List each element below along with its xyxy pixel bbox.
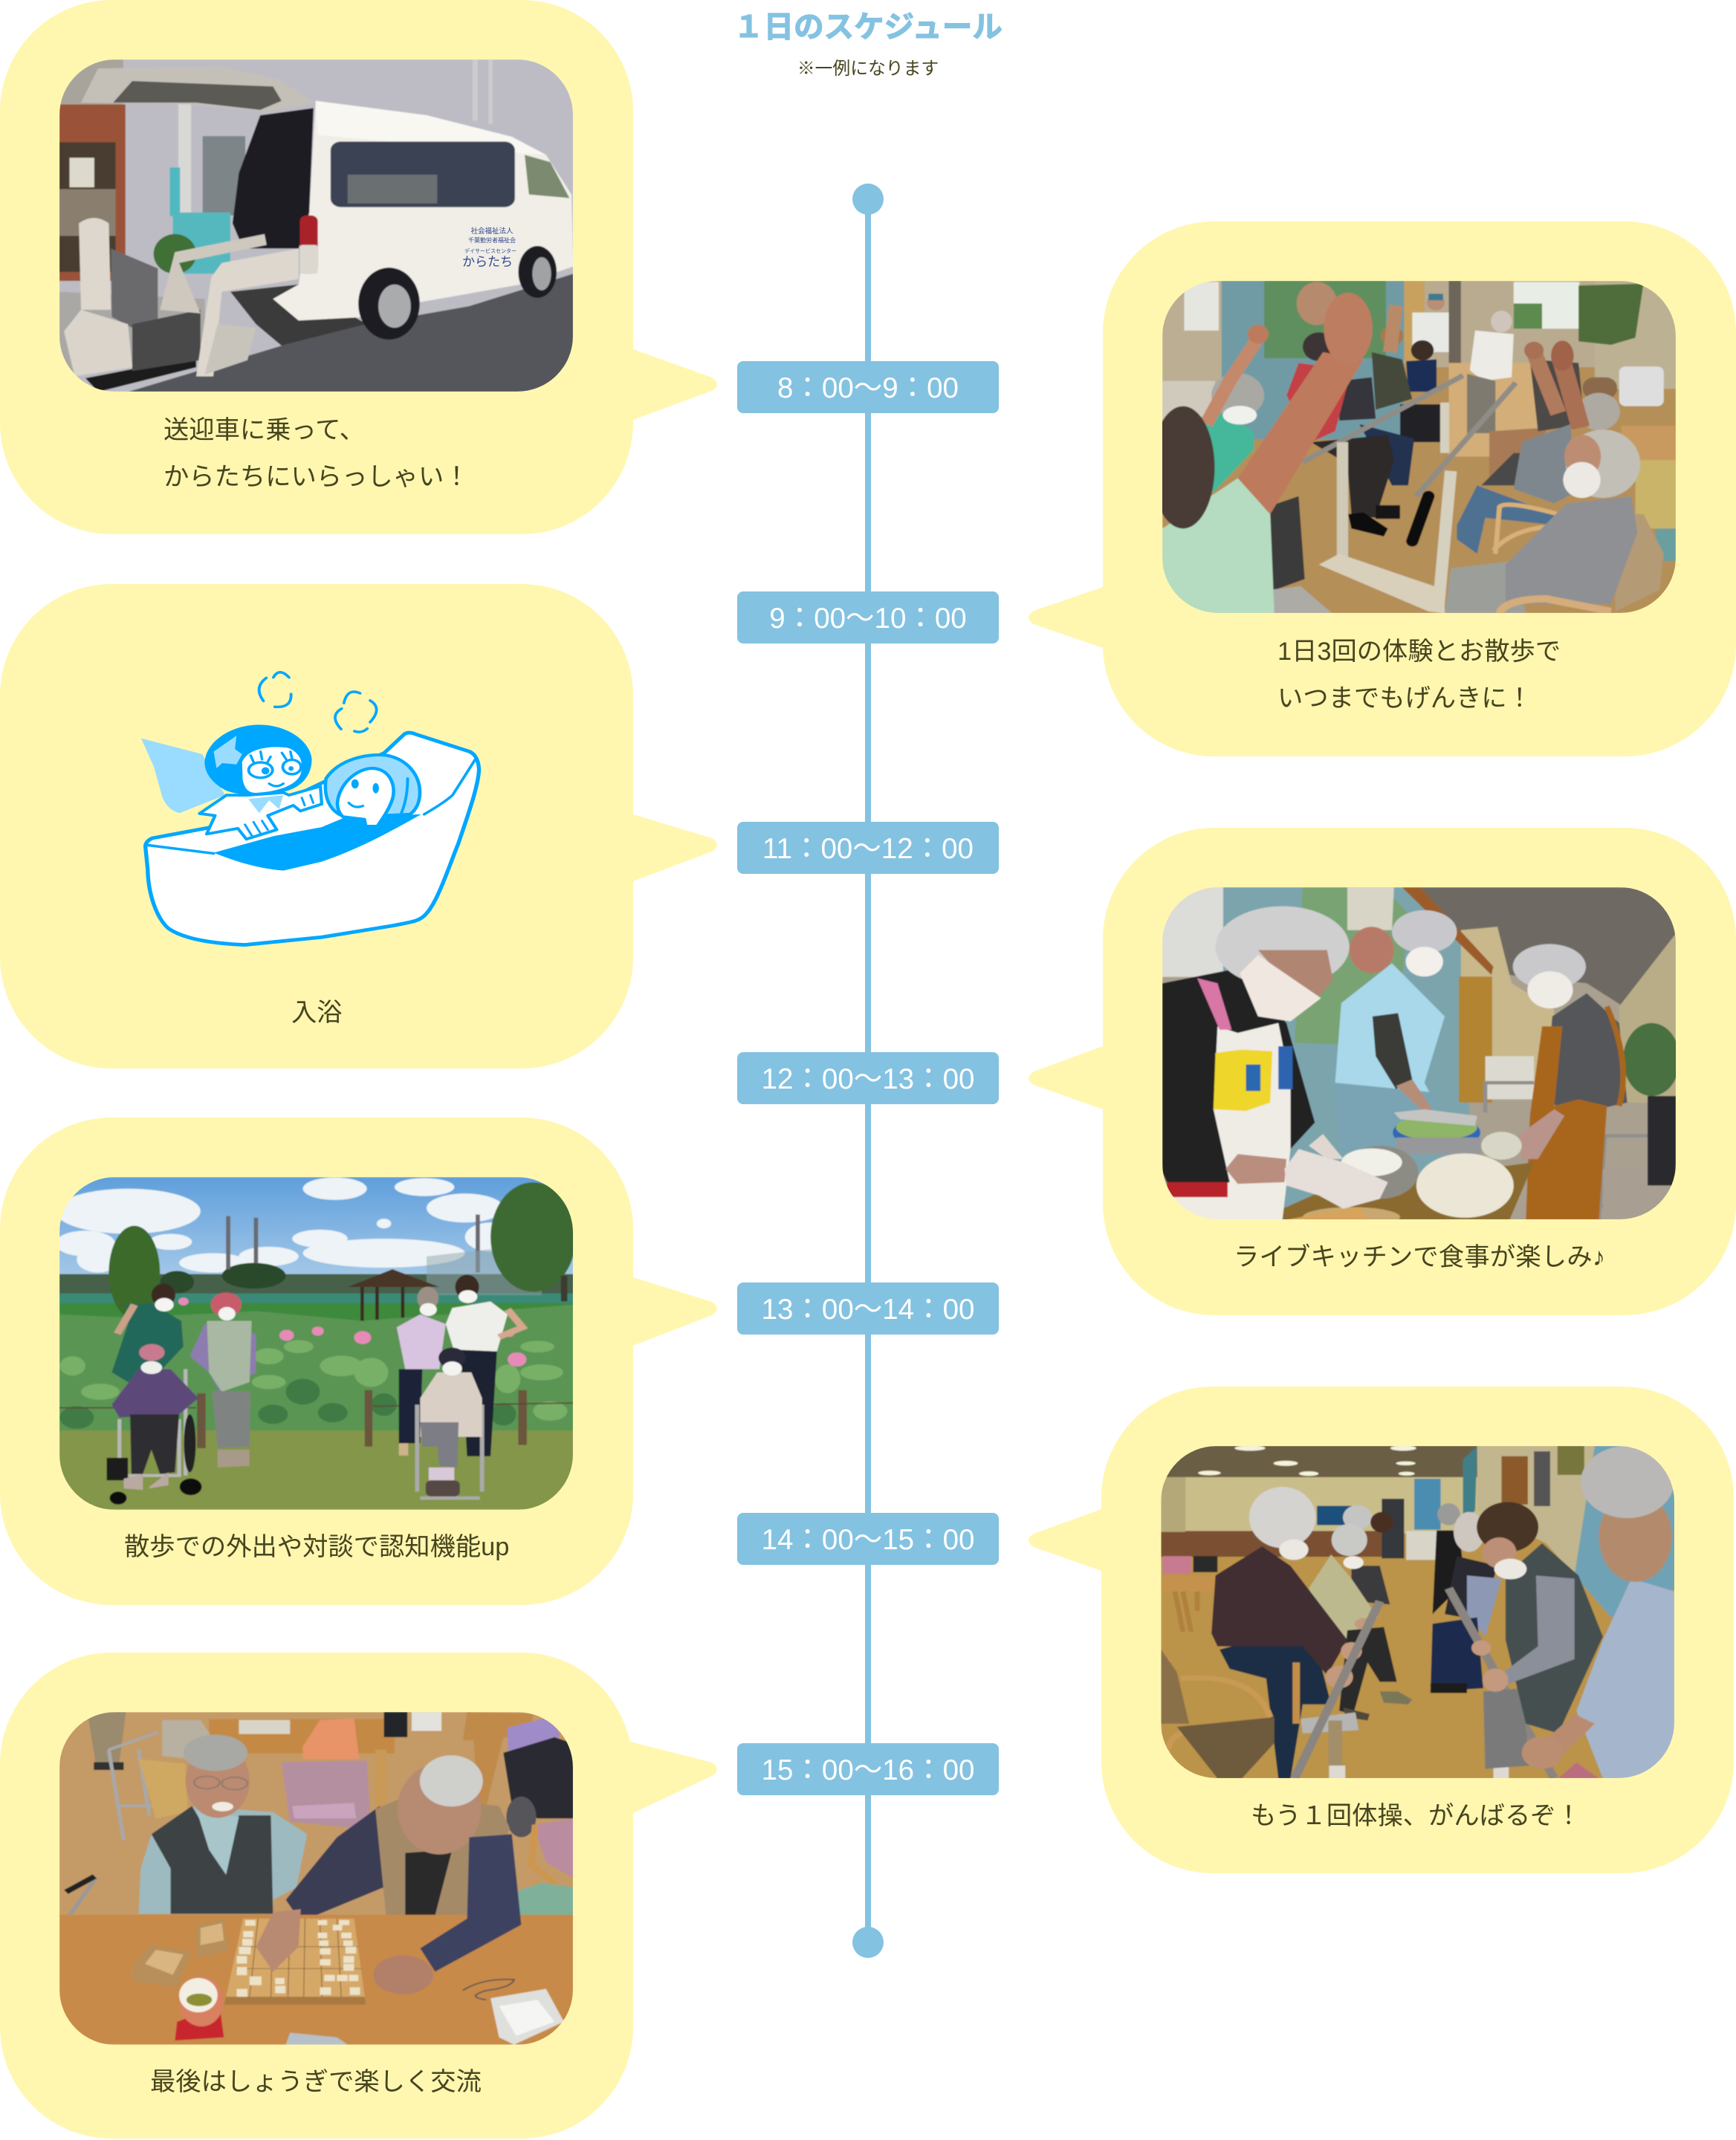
panel: afternoon exercise	[1029, 1387, 1734, 1873]
seated woman	[417, 1404, 482, 1498]
steam	[259, 672, 377, 732]
caption: いつまでもげんきに！	[1277, 684, 1532, 713]
caption: 送迎車に乗って、	[163, 416, 365, 444]
foreground left	[1269, 496, 1305, 590]
time label 15:00: 15：00〜16：00	[762, 1754, 974, 1786]
front right woman	[1576, 1579, 1675, 1778]
photo: van with lift	[59, 59, 573, 392]
tissue box	[490, 1989, 564, 2045]
title: １日のスケジュール	[733, 10, 1003, 44]
woman green shirt	[111, 1303, 184, 1382]
speech bubble	[1029, 1387, 1734, 1873]
rails	[1303, 375, 1463, 462]
wheelchair woman	[120, 1369, 186, 1476]
van lettering: 千葉勤労者福祉会	[468, 236, 516, 244]
table	[59, 1915, 573, 2045]
speech bubble	[1029, 828, 1736, 1315]
timeline start dot	[852, 184, 884, 215]
van lettering: 社会福祉法人	[470, 227, 514, 236]
second woman	[1309, 1554, 1378, 1640]
photo: rail exercise	[1161, 1445, 1675, 1778]
photo: raising arms	[1151, 281, 1676, 613]
time label 11:00: 11：00〜12：00	[762, 833, 974, 865]
far people	[1343, 1505, 1372, 1530]
van lettering: デイサービスセンター	[464, 247, 516, 254]
right seated	[1489, 428, 1546, 482]
hand on board	[256, 1909, 301, 1972]
photo: lotus pond group	[56, 1177, 576, 1510]
time label 13:00	[737, 1283, 999, 1335]
time label 14:00	[737, 1513, 999, 1565]
caption: 最後はしょうぎで楽しく交流	[150, 2068, 482, 2096]
illustration: bathing in a tub	[141, 672, 479, 945]
right man	[286, 1806, 384, 1922]
timeline end dot	[852, 1927, 884, 1958]
time label 13:00: 13：00〜14：00	[762, 1294, 974, 1326]
time label 15:00	[737, 1743, 999, 1795]
speech bubble	[1029, 221, 1736, 756]
panel: shogi	[0, 1653, 717, 2139]
bather face	[337, 768, 394, 826]
chair	[1166, 1659, 1270, 1778]
vest woman	[1483, 1688, 1530, 1768]
time label 12:00	[737, 1052, 999, 1104]
timeline	[737, 184, 999, 1958]
caption: ライブキッチンで食事が楽しみ♪	[1234, 1243, 1605, 1271]
caption: 散歩での外出や対談で認知機能up	[124, 1533, 509, 1561]
panel: bath	[0, 584, 717, 1069]
wing	[141, 739, 225, 813]
caption: 入浴	[291, 999, 343, 1027]
speech bubble	[0, 0, 717, 534]
rails	[1295, 1601, 1380, 1778]
time label 11:00	[737, 822, 999, 874]
glasses	[463, 1980, 514, 2000]
helper face	[242, 747, 302, 793]
helper body	[199, 786, 322, 839]
time label 8:00	[737, 361, 999, 413]
caption: もう１回体操、がんばるぞ！	[1251, 1802, 1581, 1830]
speech bubble	[0, 584, 717, 1069]
time label 14:00: 14：00〜15：00	[762, 1524, 974, 1556]
panel: live kitchen	[1029, 828, 1736, 1315]
teal woman	[1200, 413, 1254, 493]
left man	[139, 1806, 307, 1914]
front left woman	[1301, 1713, 1358, 1734]
van lettering	[462, 227, 516, 269]
tub rim	[147, 759, 476, 854]
bathtub	[146, 733, 479, 945]
helper hair	[204, 724, 312, 795]
panel: pick-up van	[0, 0, 717, 534]
time label 9:00	[737, 591, 999, 643]
speech bubble	[0, 1118, 717, 1605]
caption: からたちにいらっしゃい！	[163, 463, 470, 491]
subtitle note: ※一例になります	[797, 59, 939, 79]
panel: morning exercise	[1029, 221, 1736, 756]
speech bubble	[0, 1653, 717, 2139]
van lettering: からたち	[462, 255, 513, 269]
caption: 1日3回の体験とお散歩で	[1277, 638, 1561, 666]
staff	[1412, 313, 1448, 352]
woman in vest	[190, 1324, 256, 1392]
standing woman lilac	[397, 1314, 446, 1369]
woman center	[1335, 963, 1445, 1106]
photo: playing shogi	[59, 1712, 573, 2045]
photo: cooking	[1162, 887, 1680, 1227]
bather hair	[326, 755, 420, 816]
panel: walk outing	[0, 1118, 717, 1605]
cart	[1486, 1083, 1662, 1219]
water	[214, 814, 421, 871]
woman right	[1546, 993, 1628, 1112]
bowls	[1258, 1162, 1534, 1219]
time label 12:00: 12：00〜13：00	[762, 1063, 974, 1095]
time label 9:00: 9：00〜10：00	[769, 603, 967, 635]
time label 8:00: 8：00〜9：00	[777, 372, 959, 404]
seated row left	[1406, 360, 1437, 392]
woman left	[1162, 968, 1315, 1192]
young woman	[446, 1302, 508, 1352]
glasses and features	[249, 762, 273, 778]
